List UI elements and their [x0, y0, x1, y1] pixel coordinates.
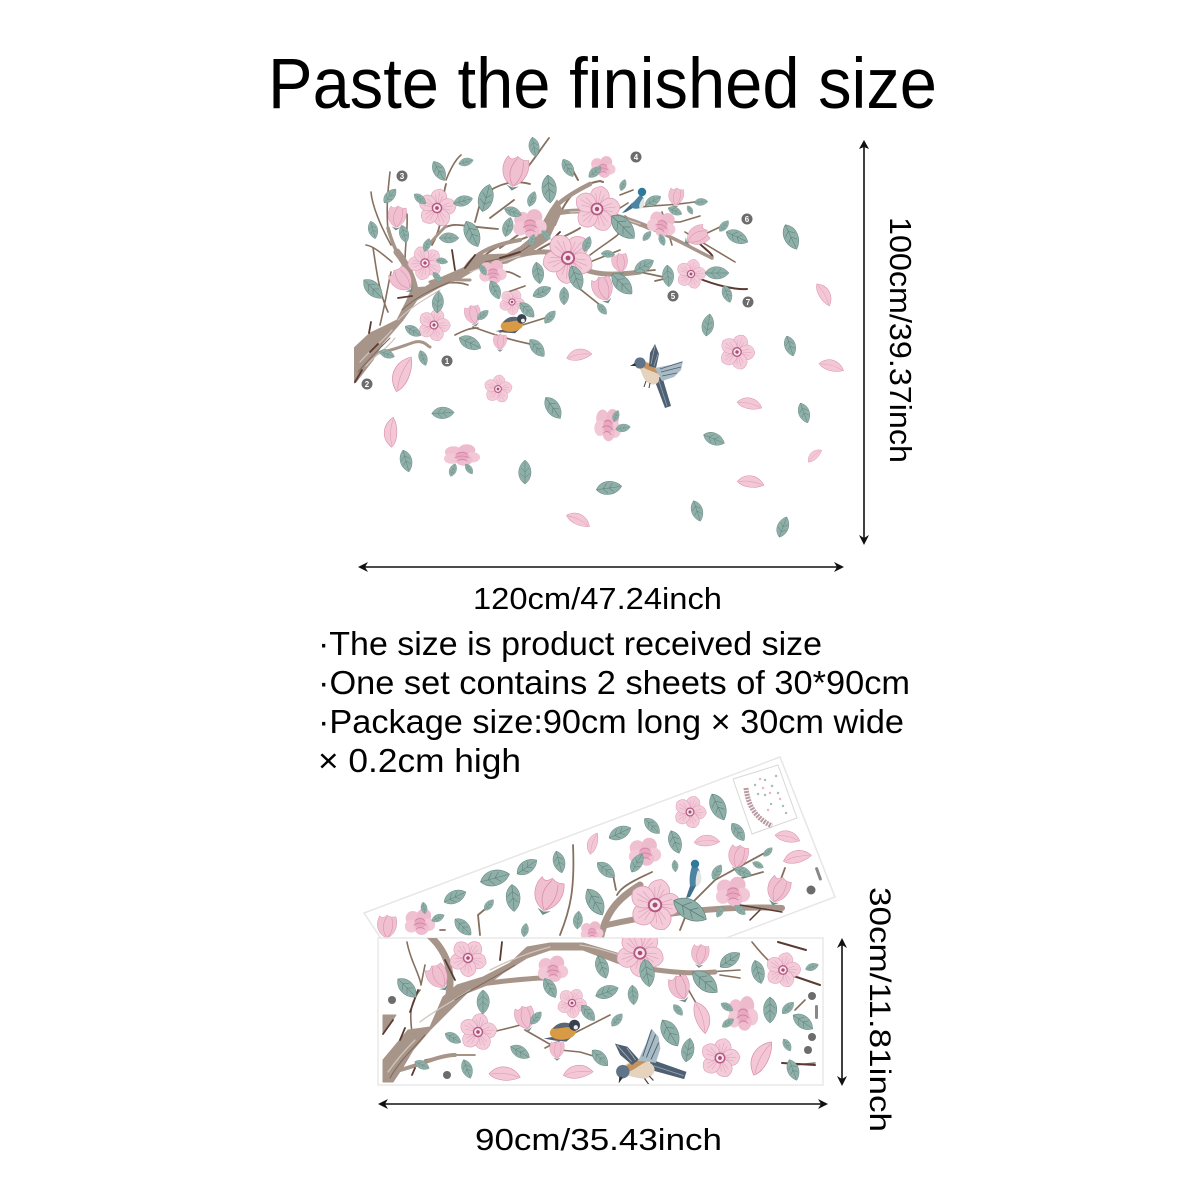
leaves on branch	[359, 136, 751, 367]
rear sticker sheet	[364, 757, 835, 1042]
numbered part markers: 5	[671, 292, 676, 301]
flying bird	[630, 344, 683, 408]
width arrow: 90cm	[378, 1099, 828, 1109]
width arrow: 120cm	[358, 562, 844, 572]
product notes: ·The size is product received size	[318, 626, 822, 663]
rear sheet part markers	[806, 867, 822, 894]
placement thumbnail	[733, 765, 797, 834]
falling petals and leaves	[383, 222, 846, 539]
product notes: ·One set contains 2 sheets of 30*90cm	[318, 665, 910, 702]
product notes	[318, 626, 910, 780]
illustration: finished wall decal branch	[354, 136, 846, 539]
small orange bird on branch	[494, 313, 528, 336]
blue bird on rear sheet	[686, 860, 702, 898]
height label: 100cm/39.37inch	[883, 217, 918, 463]
product notes: ·Package size:90cm long × 30cm wide	[318, 704, 904, 741]
numbered part markers: 4	[634, 153, 639, 162]
flying bird on front sheet	[615, 1028, 686, 1084]
orange bird on front sheet	[544, 1020, 580, 1042]
front sheet artwork clipped to the sheet	[382, 938, 821, 1084]
sheet height label: 30cm/11.81inch	[863, 887, 896, 1132]
rear sheet leaves	[420, 791, 774, 939]
front sheet leaves	[393, 948, 820, 1082]
front sheet part markers	[388, 992, 818, 1079]
numbered part markers	[362, 152, 754, 390]
title: Paste the finished size	[268, 45, 937, 124]
sheet width label: 90cm/35.43inch	[475, 1122, 722, 1157]
tree limbs	[354, 138, 747, 383]
height arrow: 30cm	[837, 938, 847, 1086]
numbered part markers: 7	[746, 298, 751, 307]
rear sheet blossoms	[377, 791, 812, 941]
rear sheet branches	[440, 845, 785, 940]
product notes: × 0.2cm high	[318, 743, 521, 780]
numbered part markers: 3	[400, 172, 405, 181]
trunk	[354, 200, 562, 383]
front sticker sheet	[377, 937, 824, 1086]
blue bird on branch	[622, 188, 646, 213]
numbered part markers: 6	[745, 215, 750, 224]
numbered part markers: 1	[445, 357, 450, 366]
numbered part markers: 2	[365, 380, 370, 389]
front sheet branches	[383, 936, 820, 1082]
width label: 120cm/47.24inch	[473, 581, 722, 616]
front sheet blossoms	[425, 938, 801, 1081]
blossoms on branch	[386, 154, 712, 352]
height arrow: 100cm	[859, 140, 869, 545]
